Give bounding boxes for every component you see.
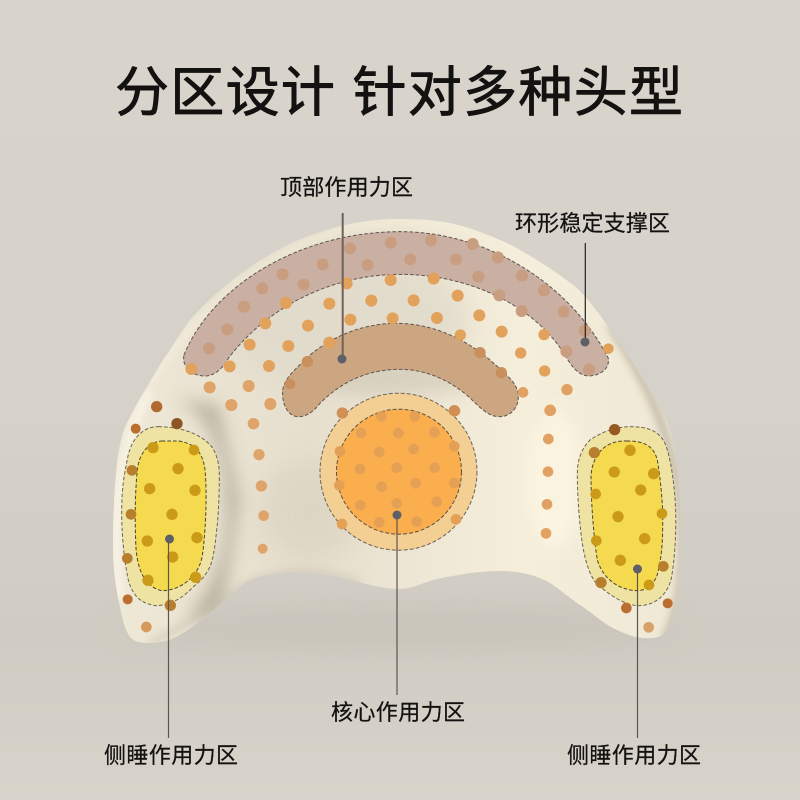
title: 分区设计 针对多种头型 — [115, 63, 683, 123]
label: left zone: 侧睡作用力区 — [104, 743, 238, 768]
leader line: top zone — [338, 213, 346, 364]
leader line: ring zone — [580, 243, 590, 346]
label: top zone: 顶部作用力区 — [280, 175, 413, 200]
label: core zone: 核心作用力区 — [331, 700, 465, 725]
leader line: left zone — [165, 534, 174, 738]
dots: right column — [518, 384, 572, 539]
dots: core zone right half — [408, 406, 461, 527]
dots: left lobe — [122, 401, 203, 632]
dots: core zone left half — [334, 408, 404, 529]
leader line: right zone — [633, 564, 642, 738]
label: right zone: 侧睡作用力区 — [567, 743, 701, 768]
panel: core zone — [320, 393, 477, 550]
dots: central field — [185, 273, 614, 429]
dots: top zone — [285, 347, 507, 389]
dots: left column — [204, 380, 276, 554]
pillow ground shadow — [120, 606, 680, 650]
panel: top pressure zone — [283, 323, 518, 417]
label: ring zone: 环形稳定支撑区 — [515, 211, 670, 236]
panel: ring stabilising band — [184, 232, 608, 376]
panel: right side-sleep zone — [577, 427, 676, 606]
dots: ring band — [203, 234, 595, 376]
panel: left side-sleep zone — [122, 427, 219, 606]
dots: top field outliers — [337, 405, 460, 419]
dots: right lobe — [589, 424, 673, 633]
pillow body — [113, 219, 682, 643]
leader line: core zone — [392, 510, 402, 695]
